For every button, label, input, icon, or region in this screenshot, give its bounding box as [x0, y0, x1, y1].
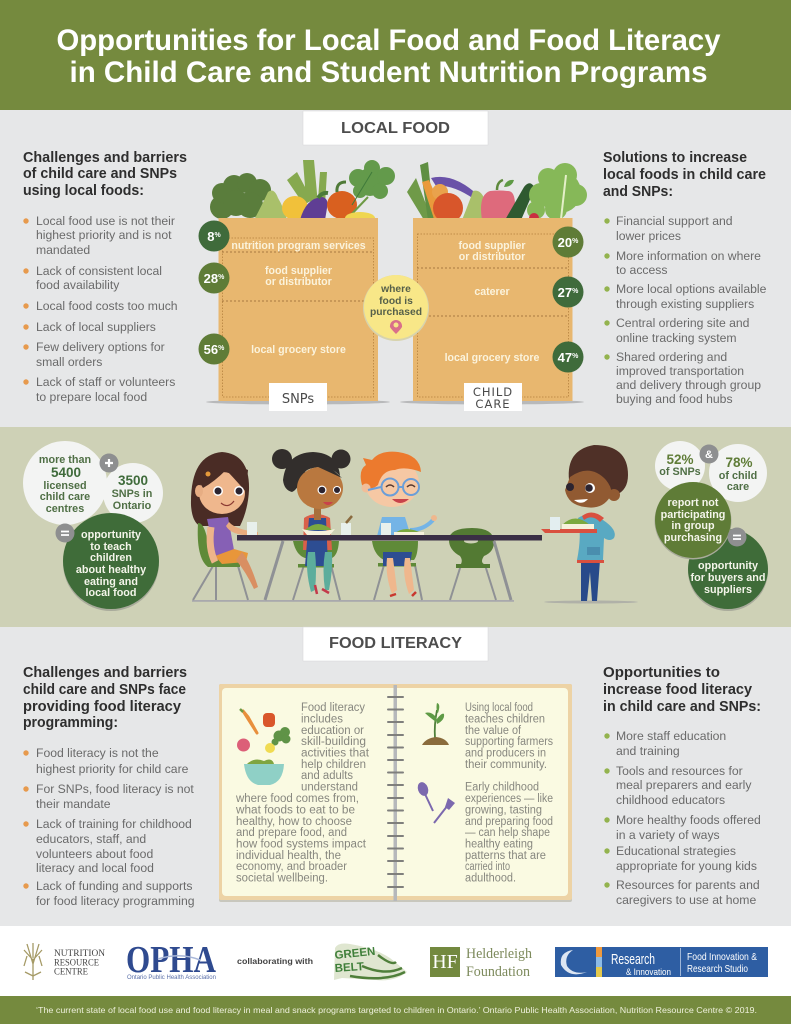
- panel: food literacy challenges: highest priority for child care: [36, 762, 189, 776]
- bubbles: group purchasing: opportunity: [698, 560, 758, 572]
- illustration: girl with brown hair: [191, 452, 258, 600]
- percentage badges: %: [572, 238, 579, 245]
- bubbles: child care centres and SNPs: centres: [46, 503, 84, 515]
- panel: food literacy challenges: educators, staff, and: [36, 832, 146, 846]
- icon: vegetables falling into salad bowl: [237, 709, 290, 785]
- panel: food literacy challenges: Lack of funding and supports: [36, 879, 193, 893]
- panel: food literacy challenges: literacy and local food: [36, 861, 154, 875]
- panel: challenges of using local foods: Local food use is not their: [36, 214, 175, 228]
- panel: food literacy opportunities: Resources for parents and: [616, 878, 760, 892]
- percentage badges: 8: [207, 229, 214, 244]
- text: food literacy definition: understand: [301, 782, 358, 794]
- text: using local food: [465, 702, 553, 884]
- callout: where food is purchased: purchased: [370, 307, 422, 318]
- bubbles: group purchasing: participating: [661, 509, 725, 521]
- panel: food literacy opportunities: and training: [616, 744, 680, 758]
- text: using local food: teaches children: [465, 714, 545, 726]
- bag: SNPs: nutrition program services: [231, 240, 366, 252]
- bag: SNPs: or distributor: [265, 276, 332, 288]
- text: food literacy definition: activities that: [301, 748, 370, 760]
- panel: food literacy opportunities: Educational strategies: [616, 844, 736, 858]
- panel: solutions to increase local foods: through existing suppliers: [616, 297, 754, 311]
- logo strip: [0, 926, 791, 996]
- text: using local food: Using local food: [465, 702, 533, 714]
- bubbles: group purchasing: of child: [719, 470, 757, 482]
- bubbles: child care centres and SNPs: about healthy: [76, 564, 146, 576]
- panel: food literacy challenges: Food literacy is not the: [36, 746, 159, 760]
- logo: George Brown Research and Innovation: [555, 947, 768, 977]
- text: using local food: Early childhood: [465, 782, 539, 794]
- panel: food literacy opportunities: appropriate for young kids: [616, 859, 757, 873]
- bubbles: child care centres and SNPs: licensed: [43, 480, 87, 492]
- label: child care: CHILD: [473, 385, 513, 399]
- logo: Greenbelt: GREEN: [334, 946, 376, 962]
- illustration: boy with red hair and glasses: [361, 452, 437, 600]
- label: child care: [464, 383, 522, 411]
- bag: child care: [400, 218, 584, 404]
- bubbles: group purchasing: suppliers: [704, 584, 752, 596]
- bag: child care: or distributor: [459, 251, 525, 263]
- panel: solutions to increase local foods: More information on where: [616, 249, 761, 263]
- logo: OPHA: Ontario Public Health Association: [127, 974, 216, 981]
- callout: where food is purchased: food is: [379, 296, 413, 307]
- panel: solutions to increase local foods: [603, 150, 767, 406]
- label: SNPs: SNPs: [282, 392, 314, 407]
- logo: Greenbelt: BELT: [334, 961, 364, 975]
- percentage badges: %: [572, 288, 579, 295]
- percentage badges: %: [218, 274, 225, 281]
- vegetables above SNPs bag: [210, 160, 395, 224]
- logo: George Brown Research and Innovation: & Innovation: [626, 967, 671, 977]
- bag: child care: local grocery store: [445, 352, 540, 364]
- logo: Helderleigh Foundation: [430, 946, 532, 980]
- section heading: local food: LOCAL FOOD: [341, 120, 450, 137]
- panel: challenges of using local foods: Few delivery options for: [36, 340, 165, 354]
- panel: solutions to increase local foods: More local options available: [616, 282, 767, 296]
- logo: Nutrition Resource Centre: RESOURCE: [54, 958, 99, 968]
- text: using local food: experiences — like: [465, 793, 553, 805]
- text: food literacy definition: skill-building: [301, 736, 366, 748]
- panel: food literacy opportunities: in a variety of ways: [616, 828, 720, 842]
- footer citation: ‘The current state of local food use and food literacy in meal and snack programs targeted to children in Ontario.’ Ontario Public Health Association, Nutrition Resource Centre © 2019.: [36, 1005, 757, 1015]
- text: food literacy definition: healthy, how to choose: [236, 816, 352, 828]
- illustration: table with empty chair: [237, 528, 542, 600]
- bubbles: group purchasing: [654, 441, 768, 611]
- text: food literacy definition: economy, and broader: [236, 861, 347, 873]
- panel: food literacy challenges: Lack of training for childhood: [36, 817, 192, 831]
- icon: seedling: [422, 703, 449, 745]
- text: using local food: adulthood.: [465, 872, 516, 884]
- percentage badges: %: [214, 232, 222, 239]
- panel: challenges of using local foods: Local food costs too much: [36, 299, 178, 313]
- text: using local food: healthy eating: [465, 838, 533, 850]
- percentage badges: 28: [204, 271, 218, 286]
- panel: solutions to increase local foods: improved transportation: [616, 364, 744, 378]
- title banner: [0, 0, 791, 110]
- callout: where food is purchased: [363, 275, 429, 341]
- footer citation: [0, 996, 791, 1024]
- bubbles: child care centres and SNPs: eating and: [84, 576, 138, 588]
- text: food literacy definition: and prepare food, and: [236, 827, 347, 839]
- section heading: local food: [303, 111, 488, 145]
- panel: solutions to increase local foods: lower prices: [616, 229, 681, 243]
- panel: solutions to increase local foods: Solutions to increase: [603, 150, 747, 166]
- percentage badges: 56: [204, 342, 218, 357]
- bag: child care: caterer: [474, 286, 510, 298]
- logo: Greenbelt: [334, 944, 407, 980]
- panel: challenges of using local foods: small orders: [36, 355, 102, 369]
- bubbles: child care centres and SNPs: child care: [40, 491, 90, 503]
- bubbles: group purchasing: 52%: [666, 452, 694, 467]
- text: using local food: the value of: [465, 725, 522, 737]
- logo: George Brown Research and Innovation: Research Studio: [687, 963, 748, 975]
- text: food literacy definition: how food systems impact: [236, 838, 367, 850]
- percentage badges: [198, 220, 584, 372]
- logo: Nutrition Resource Centre: CENTRE: [54, 966, 88, 976]
- text: food literacy definition: and adults: [301, 770, 353, 782]
- bubbles: child care centres and SNPs: more than: [39, 454, 91, 466]
- panel: challenges of using local foods: Lack of local suppliers: [36, 320, 156, 334]
- title banner: Opportunities for Local Food and Food Literacy: [56, 24, 721, 57]
- panel: challenges of using local foods: [23, 150, 187, 404]
- label: child care: CARE: [475, 397, 511, 411]
- text: using local food: and preparing food: [465, 816, 553, 828]
- panel: solutions to increase local foods: online tracking system: [616, 331, 737, 345]
- text: using local food: carried into: [465, 861, 510, 873]
- text: using local food: growing, tasting: [465, 804, 542, 816]
- logo: Nutrition Resource Centre: NUTRITION: [54, 948, 106, 958]
- callout: where food is purchased: where: [380, 284, 411, 295]
- panel: food literacy opportunities: Opportunities to: [603, 665, 720, 681]
- panel: food literacy opportunities: increase food literacy: [603, 682, 752, 698]
- panel: challenges of using local foods: Lack of consistent local: [36, 264, 162, 278]
- section heading: food literacy: FOOD LITERACY: [329, 635, 462, 652]
- panel: challenges of using local foods: of child care and SNPs: [23, 166, 177, 182]
- illustration: boy carrying tray: [541, 445, 638, 604]
- panel: challenges of using local foods: Challenges and barriers: [23, 150, 187, 166]
- panel: food literacy opportunities: [603, 665, 761, 907]
- panel: challenges of using local foods: mandated: [36, 243, 90, 257]
- bubbles: child care centres and SNPs: local food: [86, 587, 136, 599]
- panel: challenges of using local foods: using local foods:: [23, 183, 144, 199]
- bubbles: child care centres and SNPs: SNPs in: [112, 488, 152, 500]
- text: using local food: supporting farmers: [465, 736, 553, 748]
- panel: solutions to increase local foods: and delivery through group: [616, 378, 761, 392]
- panel: solutions to increase local foods: local foods in child care: [603, 167, 766, 183]
- logo: Helderleigh Foundation: Helderleigh: [466, 946, 532, 962]
- bubbles: group purchasing: &: [705, 449, 713, 461]
- section heading: food literacy: [303, 627, 488, 661]
- panel: food literacy opportunities: More staff education: [616, 729, 726, 743]
- bubbles: child care centres and SNPs: [23, 441, 163, 611]
- floor line: [192, 600, 514, 602]
- bubbles: group purchasing: 78%: [725, 455, 753, 470]
- bubbles: group purchasing: for buyers and: [690, 572, 766, 584]
- panel: food literacy challenges: volunteers about food: [36, 847, 153, 861]
- bubbles: group purchasing: purchasing: [664, 532, 722, 544]
- bag: SNPs: local grocery store: [251, 344, 346, 356]
- panel: solutions to increase local foods: Central ordering site and: [616, 316, 749, 330]
- panel: food literacy opportunities: More healthy foods offered: [616, 813, 761, 827]
- logo: Helderleigh Foundation: HF: [432, 951, 458, 973]
- text: using local food: — can help shape: [465, 827, 550, 839]
- bubbles: child care centres and SNPs: to teach: [90, 541, 132, 553]
- text: using local food: and producers in: [465, 748, 546, 760]
- title banner: in Child Care and Student Nutrition Programs: [70, 56, 708, 89]
- panel: food literacy opportunities: meal preparers and early: [616, 778, 752, 792]
- panel: notebook: [219, 684, 572, 902]
- bag: SNPs: [206, 218, 390, 404]
- panel: challenges of using local foods: highest priority and is not: [36, 228, 172, 242]
- vegetables above child care bag: [407, 162, 587, 223]
- bag: SNPs: food supplier: [265, 265, 332, 277]
- text: food literacy definition: societal wellbeing.: [236, 872, 328, 884]
- bag: child care: food supplier: [458, 240, 526, 252]
- panel: challenges of using local foods: to prepare local food: [36, 390, 147, 404]
- text: using local food: patterns that are: [465, 850, 546, 862]
- text: food literacy definition: individual health, the: [236, 850, 341, 862]
- bubbles: child care centres and SNPs: opportunity: [81, 529, 141, 541]
- panel: food literacy challenges: programming:: [23, 715, 118, 731]
- text: food literacy definition: education or: [301, 725, 364, 737]
- panel: food literacy challenges: [23, 665, 195, 908]
- panel: solutions to increase local foods: buying and food hubs: [616, 392, 733, 406]
- panel: challenges of using local foods: Lack of staff or volunteers: [36, 375, 175, 389]
- text: food literacy definition: Food literacy: [301, 702, 365, 714]
- text: food literacy definition: help children: [301, 759, 366, 771]
- panel: solutions to increase local foods: and SNPs:: [603, 184, 673, 200]
- label: SNPs: [269, 383, 327, 411]
- band: children at table: [0, 427, 791, 627]
- bubbles: child care centres and SNPs: 3500: [118, 473, 148, 488]
- percentage badges: 47: [558, 350, 572, 365]
- text: using local food: their community.: [465, 759, 547, 771]
- bubbles: child care centres and SNPs: children: [90, 552, 132, 564]
- panel: solutions to increase local foods: Shared ordering and: [616, 350, 727, 364]
- percentage badges: %: [572, 353, 579, 360]
- percentage badges: 20: [558, 235, 572, 250]
- bubbles: group purchasing: care: [727, 481, 749, 493]
- panel: food literacy opportunities: Tools and resources for: [616, 764, 743, 778]
- percentage badges: 27: [558, 285, 572, 300]
- bubbles: group purchasing: of SNPs: [659, 466, 701, 478]
- panel: challenges of using local foods: food availability: [36, 278, 120, 292]
- bubbles: child care centres and SNPs: 5400: [51, 465, 81, 480]
- panel: food literacy opportunities: childhood educators: [616, 793, 725, 807]
- text: food literacy definition: includes: [301, 714, 343, 726]
- text: collaborating with: collaborating with: [237, 956, 313, 966]
- logo: Nutrition Resource Centre: [24, 943, 106, 980]
- icon: spoon and fork: [416, 781, 455, 823]
- panel: food literacy challenges: Challenges and barriers: [23, 665, 187, 681]
- text: food literacy definition: what foods to eat to be: [235, 804, 355, 816]
- text: food literacy definition: where food comes from,: [235, 793, 359, 805]
- illustration: girl with hair buns: [272, 449, 352, 600]
- panel: solutions to increase local foods: Financial support and: [616, 214, 733, 228]
- logo: George Brown Research and Innovation: Research: [611, 951, 655, 968]
- text: food literacy definition: [235, 702, 370, 884]
- panel: food literacy opportunities: in child care and SNPs:: [603, 699, 761, 715]
- bubbles: group purchasing: report not: [668, 497, 719, 509]
- logo: George Brown Research and Innovation: Food Innovation &: [687, 951, 757, 963]
- percentage badges: %: [218, 345, 225, 352]
- bubbles: child care centres and SNPs: Ontario: [113, 500, 152, 512]
- panel: food literacy challenges: their mandate: [36, 797, 111, 811]
- bubbles: group purchasing: in group: [671, 520, 715, 532]
- panel: food literacy challenges: providing food literacy: [23, 699, 181, 715]
- panel: food literacy opportunities: caregivers to use at home: [616, 893, 756, 907]
- panel: food literacy challenges: For SNPs, food literacy is not: [36, 782, 194, 796]
- panel: food literacy challenges: child care and SNPs face: [23, 682, 186, 698]
- panel: solutions to increase local foods: to access: [616, 263, 667, 277]
- logo: OPHA: OPHA: [126, 939, 216, 981]
- panel: food literacy challenges: for food literacy programming: [36, 894, 195, 908]
- logo: Helderleigh Foundation: Foundation: [466, 964, 530, 980]
